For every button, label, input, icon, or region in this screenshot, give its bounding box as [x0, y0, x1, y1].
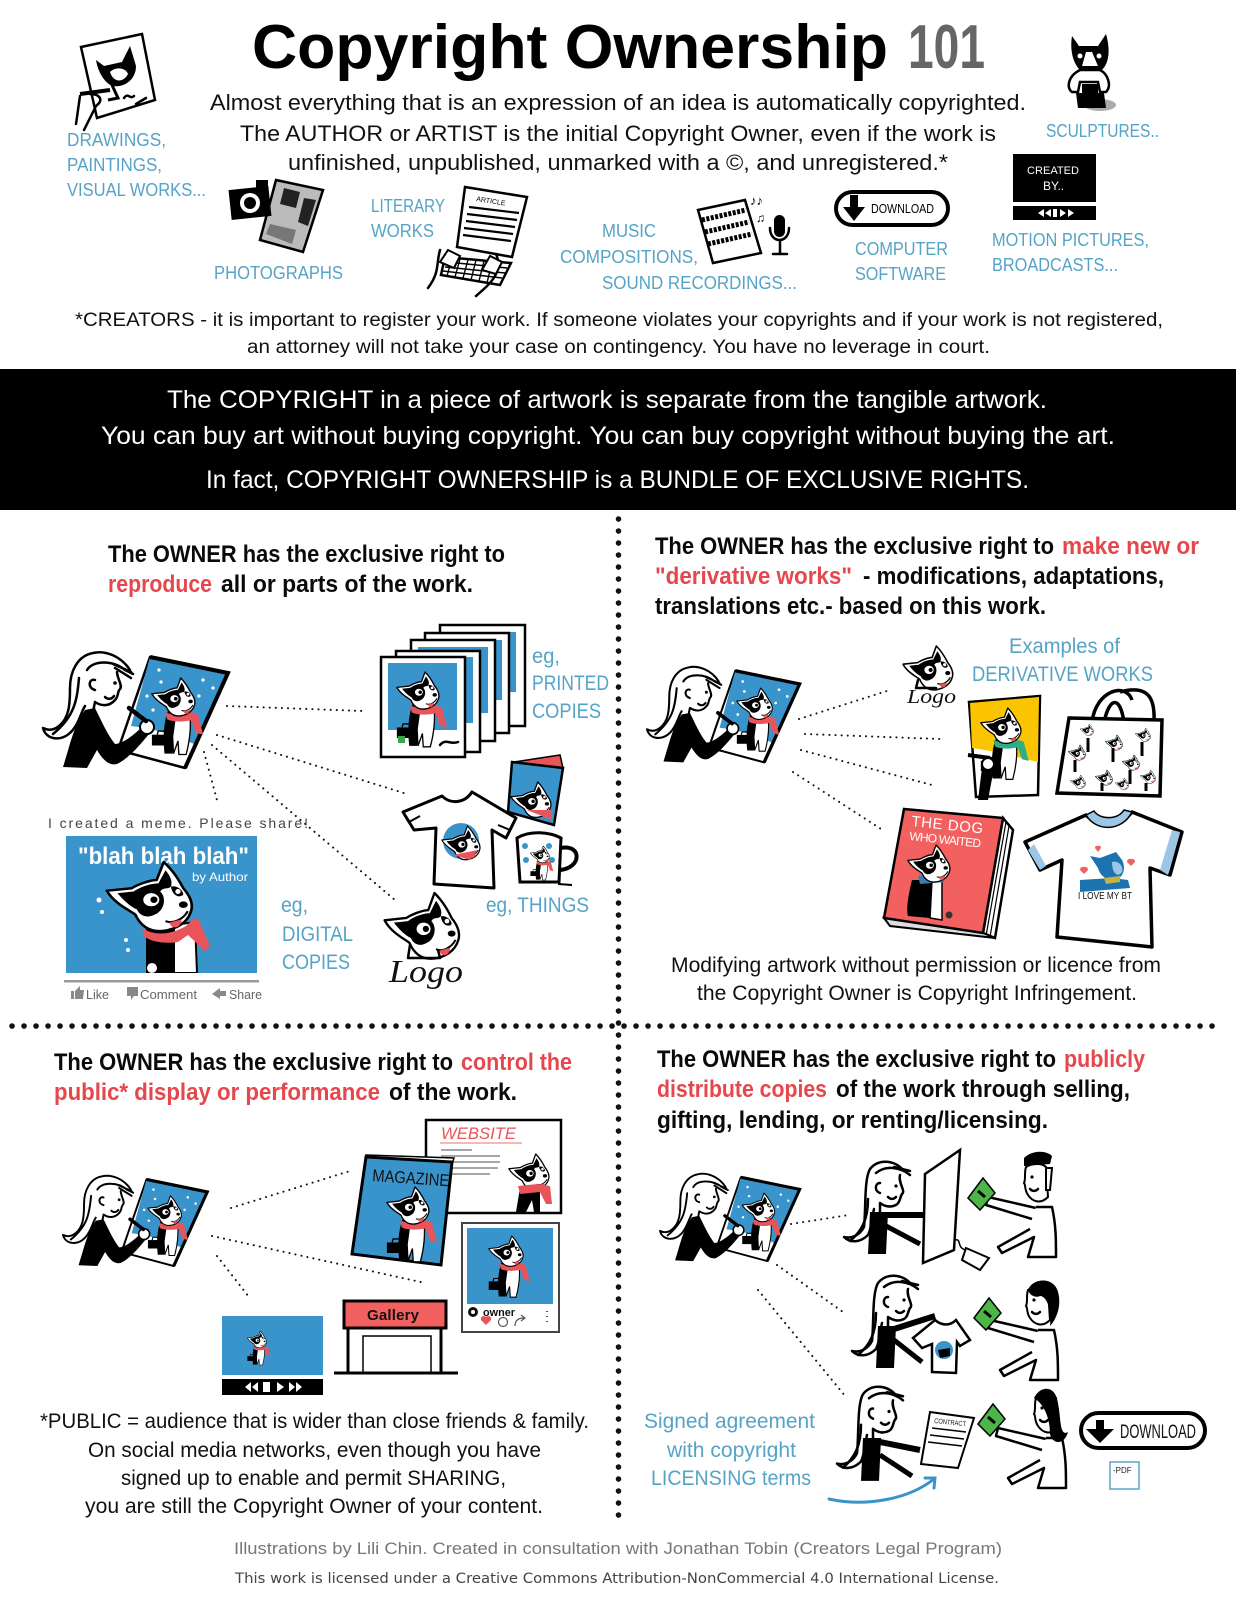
website: WEBSITE — [441, 1124, 517, 1143]
heading: derivative works — [655, 533, 1199, 620]
heading: display: The OWNER has the exclusive right to — [54, 1049, 453, 1076]
public note: *PUBLIC = audience that is wider than close friends & family. — [40, 1410, 589, 1433]
label: examples: DERIVATIVE WORKS — [972, 663, 1153, 686]
mug — [517, 833, 577, 885]
heading: distribute: gifting, lending, or renting/licensing. — [657, 1107, 1048, 1134]
infringement note: Modifying artwork without permission or licence from — [671, 954, 1161, 977]
yellow art card — [968, 696, 1040, 800]
label: licensing — [644, 1410, 815, 1490]
label: printed copies: eg, — [532, 645, 560, 668]
label: licensing: LICENSING terms — [651, 1467, 811, 1490]
icon: video screen: BY.. — [1043, 179, 1064, 193]
label: literary works: LITERARY — [371, 196, 445, 216]
icon: download button — [836, 192, 948, 225]
heading: derivative works: "derivative works" — [655, 563, 852, 590]
label: digital copies: eg, — [281, 894, 308, 917]
label: drawings — [67, 130, 206, 200]
label: digital copies: COPIES — [282, 951, 350, 974]
heading: derivative works: translations etc.- based on this work. — [655, 593, 1046, 620]
public note: signed up to enable and permit SHARING, — [121, 1467, 506, 1490]
book: WHO WAITED — [909, 829, 982, 851]
label: examples — [972, 635, 1153, 686]
label: literary works — [371, 196, 445, 241]
label: examples: Examples of — [1009, 635, 1120, 658]
meme post — [64, 836, 262, 1002]
label: printed copies — [532, 645, 609, 723]
gifting scene — [852, 1276, 1059, 1380]
black banner: The COPYRIGHT in a piece of artwork is separate from the tangible artwork. — [167, 386, 1047, 414]
infringement note — [671, 954, 1161, 1005]
meme caption: I created a meme. Please share! — [48, 815, 308, 831]
label: music: SOUND RECORDINGS... — [602, 273, 797, 293]
licensing scene: CONTRACT — [934, 1418, 967, 1428]
heading: distribute: distribute copies — [657, 1076, 827, 1103]
heading: display: of the work. — [389, 1079, 517, 1106]
icon: video screen — [1013, 154, 1096, 220]
public note — [40, 1410, 589, 1518]
icon: sculpture — [1069, 34, 1116, 111]
small logo: Logo — [906, 686, 956, 708]
book: THE DOG — [911, 813, 984, 838]
icon: download button: DOWNLOAD — [871, 201, 934, 216]
label: things: eg, THINGS — [486, 894, 589, 917]
heading: derivative works: make new or — [1062, 533, 1199, 560]
meme post: "blah blah blah" — [78, 843, 249, 870]
ringer t-shirt: I LOVE MY BT — [1078, 891, 1132, 902]
artist painting — [660, 1174, 800, 1261]
pdf file: -PDF — [1113, 1466, 1132, 1475]
icon: camera and photo — [229, 180, 323, 252]
heading: display: control the — [461, 1049, 572, 1076]
label: photographs: PHOTOGRAPHS — [214, 263, 343, 283]
label: printed copies: PRINTED — [532, 672, 609, 695]
printed copies — [381, 625, 525, 757]
meme post: Like — [86, 987, 109, 1002]
intro text — [210, 90, 1026, 175]
artist painting — [43, 652, 228, 768]
magazine — [352, 1155, 454, 1265]
public note: On social media networks, even though you have — [88, 1439, 541, 1462]
panel: derivative works — [647, 533, 1199, 1005]
meme post: Share — [229, 987, 262, 1002]
horizontal dotted divider — [12, 1023, 1214, 1029]
dotted connectors — [793, 691, 940, 829]
black banner — [0, 369, 1236, 510]
arrow: licensing — [829, 1478, 935, 1502]
label: computer software: SOFTWARE — [855, 264, 946, 284]
label: licensing: with copyright — [666, 1439, 796, 1462]
intro text: Almost everything that is an expression of an idea is automatically copyrighted. — [210, 90, 1026, 115]
logo — [385, 893, 463, 989]
download button: DOWNLOAD — [1120, 1422, 1196, 1443]
social post: owner — [483, 1307, 516, 1319]
label: drawings: PAINTINGS, — [67, 155, 162, 175]
vertical dotted divider — [616, 519, 621, 1522]
creators note — [75, 310, 1163, 358]
video player — [222, 1316, 323, 1395]
pdf file — [1110, 1462, 1139, 1489]
gallery — [334, 1301, 458, 1373]
tote bag — [1057, 690, 1162, 796]
panel: distribute copies — [644, 1046, 1205, 1502]
magazine: MAGAZINE — [372, 1166, 450, 1190]
label: motion pictures — [992, 230, 1149, 275]
heading: derivative works: - modifications, adaptations, — [863, 563, 1164, 590]
label: music: COMPOSITIONS, — [560, 247, 698, 267]
heading: reproduce — [108, 541, 505, 598]
heading: distribute — [657, 1046, 1146, 1134]
public note: you are still the Copyright Owner of your content. — [85, 1495, 543, 1518]
label: motion pictures: BROADCASTS... — [992, 255, 1118, 275]
download button — [1081, 1413, 1205, 1448]
greeting card — [508, 755, 563, 825]
small logo — [903, 646, 956, 708]
panel: reproduce — [43, 541, 609, 1002]
heading: distribute: of the work through selling, — [836, 1076, 1130, 1103]
licensing scene — [837, 1387, 1068, 1488]
intro text: The AUTHOR or ARTIST is the initial Copyright Owner, even if the work is — [240, 121, 996, 146]
panel: display or performance — [40, 1049, 589, 1518]
icon: article and keyboard: ARTICLE — [476, 196, 506, 208]
selling scene — [844, 1150, 1056, 1270]
label: digital copies — [281, 894, 353, 974]
artist painting — [647, 667, 800, 762]
heading: reproduce: all or parts of the work. — [221, 571, 473, 598]
label: motion pictures: MOTION PICTURES, — [992, 230, 1149, 250]
icon: sheet music and microphone: ♪♪ — [750, 193, 763, 208]
title: Copyright Ownership — [252, 13, 888, 82]
intro text: unfinished, unpublished, unmarked with a ©, and unregistered.* — [288, 150, 948, 175]
dotted connectors — [204, 706, 407, 900]
heading: reproduce: reproduce — [108, 571, 212, 598]
gallery: Gallery — [367, 1307, 420, 1324]
heading: distribute: publicly — [1064, 1046, 1146, 1073]
label: sculptures: SCULPTURES.. — [1046, 121, 1159, 141]
book — [884, 809, 1013, 938]
dotted connectors — [758, 1215, 849, 1397]
social post — [462, 1223, 559, 1332]
ringer t-shirt — [1025, 810, 1182, 947]
icon: video screen: CREATED — [1027, 165, 1079, 177]
label: computer software — [855, 239, 948, 284]
infringement note: the Copyright Owner is Copyright Infringement. — [697, 982, 1137, 1005]
black banner: In fact, COPYRIGHT OWNERSHIP is a BUNDLE OF EXCLUSIVE RIGHTS. — [206, 466, 1029, 494]
label: music: MUSIC — [602, 221, 656, 241]
heading: display: public* display or performance — [54, 1079, 380, 1106]
heading: display — [54, 1049, 572, 1106]
meme post: by Author — [192, 870, 248, 884]
credits: This work is licensed under a Creative Commons Attribution-NonCommercial 4.0 International License. — [234, 1571, 999, 1587]
logo: Logo — [388, 953, 463, 989]
label: drawings: DRAWINGS, — [67, 130, 166, 150]
black banner: You can buy art without buying copyright. You can buy copyright without buying the art. — [101, 422, 1115, 450]
creators note: *CREATORS - it is important to register your work. If someone violates your copyrights and if your work is not registered, — [75, 310, 1163, 331]
label: drawings: VISUAL WORKS... — [67, 180, 206, 200]
heading: derivative works: The OWNER has the exclusive right to — [655, 533, 1054, 560]
label: licensing: Signed agreement — [644, 1410, 815, 1433]
label: literary works: WORKS — [371, 221, 434, 241]
icon: article and keyboard — [428, 187, 527, 296]
dotted connectors — [212, 1171, 425, 1297]
credits — [234, 1539, 1002, 1587]
icon: drawing on paper — [76, 34, 155, 130]
heading: reproduce: The OWNER has the exclusive right to — [108, 541, 505, 568]
meme post: Comment — [140, 987, 197, 1002]
t-shirt — [403, 792, 516, 888]
artist painting — [63, 1176, 207, 1266]
label: music — [560, 221, 797, 293]
icon: sheet music and microphone — [698, 193, 789, 263]
heading: distribute: The OWNER has the exclusive right to — [657, 1046, 1056, 1073]
website — [426, 1120, 561, 1213]
credits: Illustrations by Lili Chin. Created in consultation with Jonathan Tobin (Creators Legal Program) — [234, 1539, 1002, 1558]
label: printed copies: COPIES — [532, 700, 601, 723]
creators note: an attorney will not take your case on contingency. You have no leverage in court. — [247, 337, 990, 358]
label: computer software: COMPUTER — [855, 239, 948, 259]
title: 101 — [908, 13, 985, 82]
icon: sheet music and microphone: ♫ — [756, 211, 765, 225]
label: digital copies: DIGITAL — [282, 923, 353, 946]
